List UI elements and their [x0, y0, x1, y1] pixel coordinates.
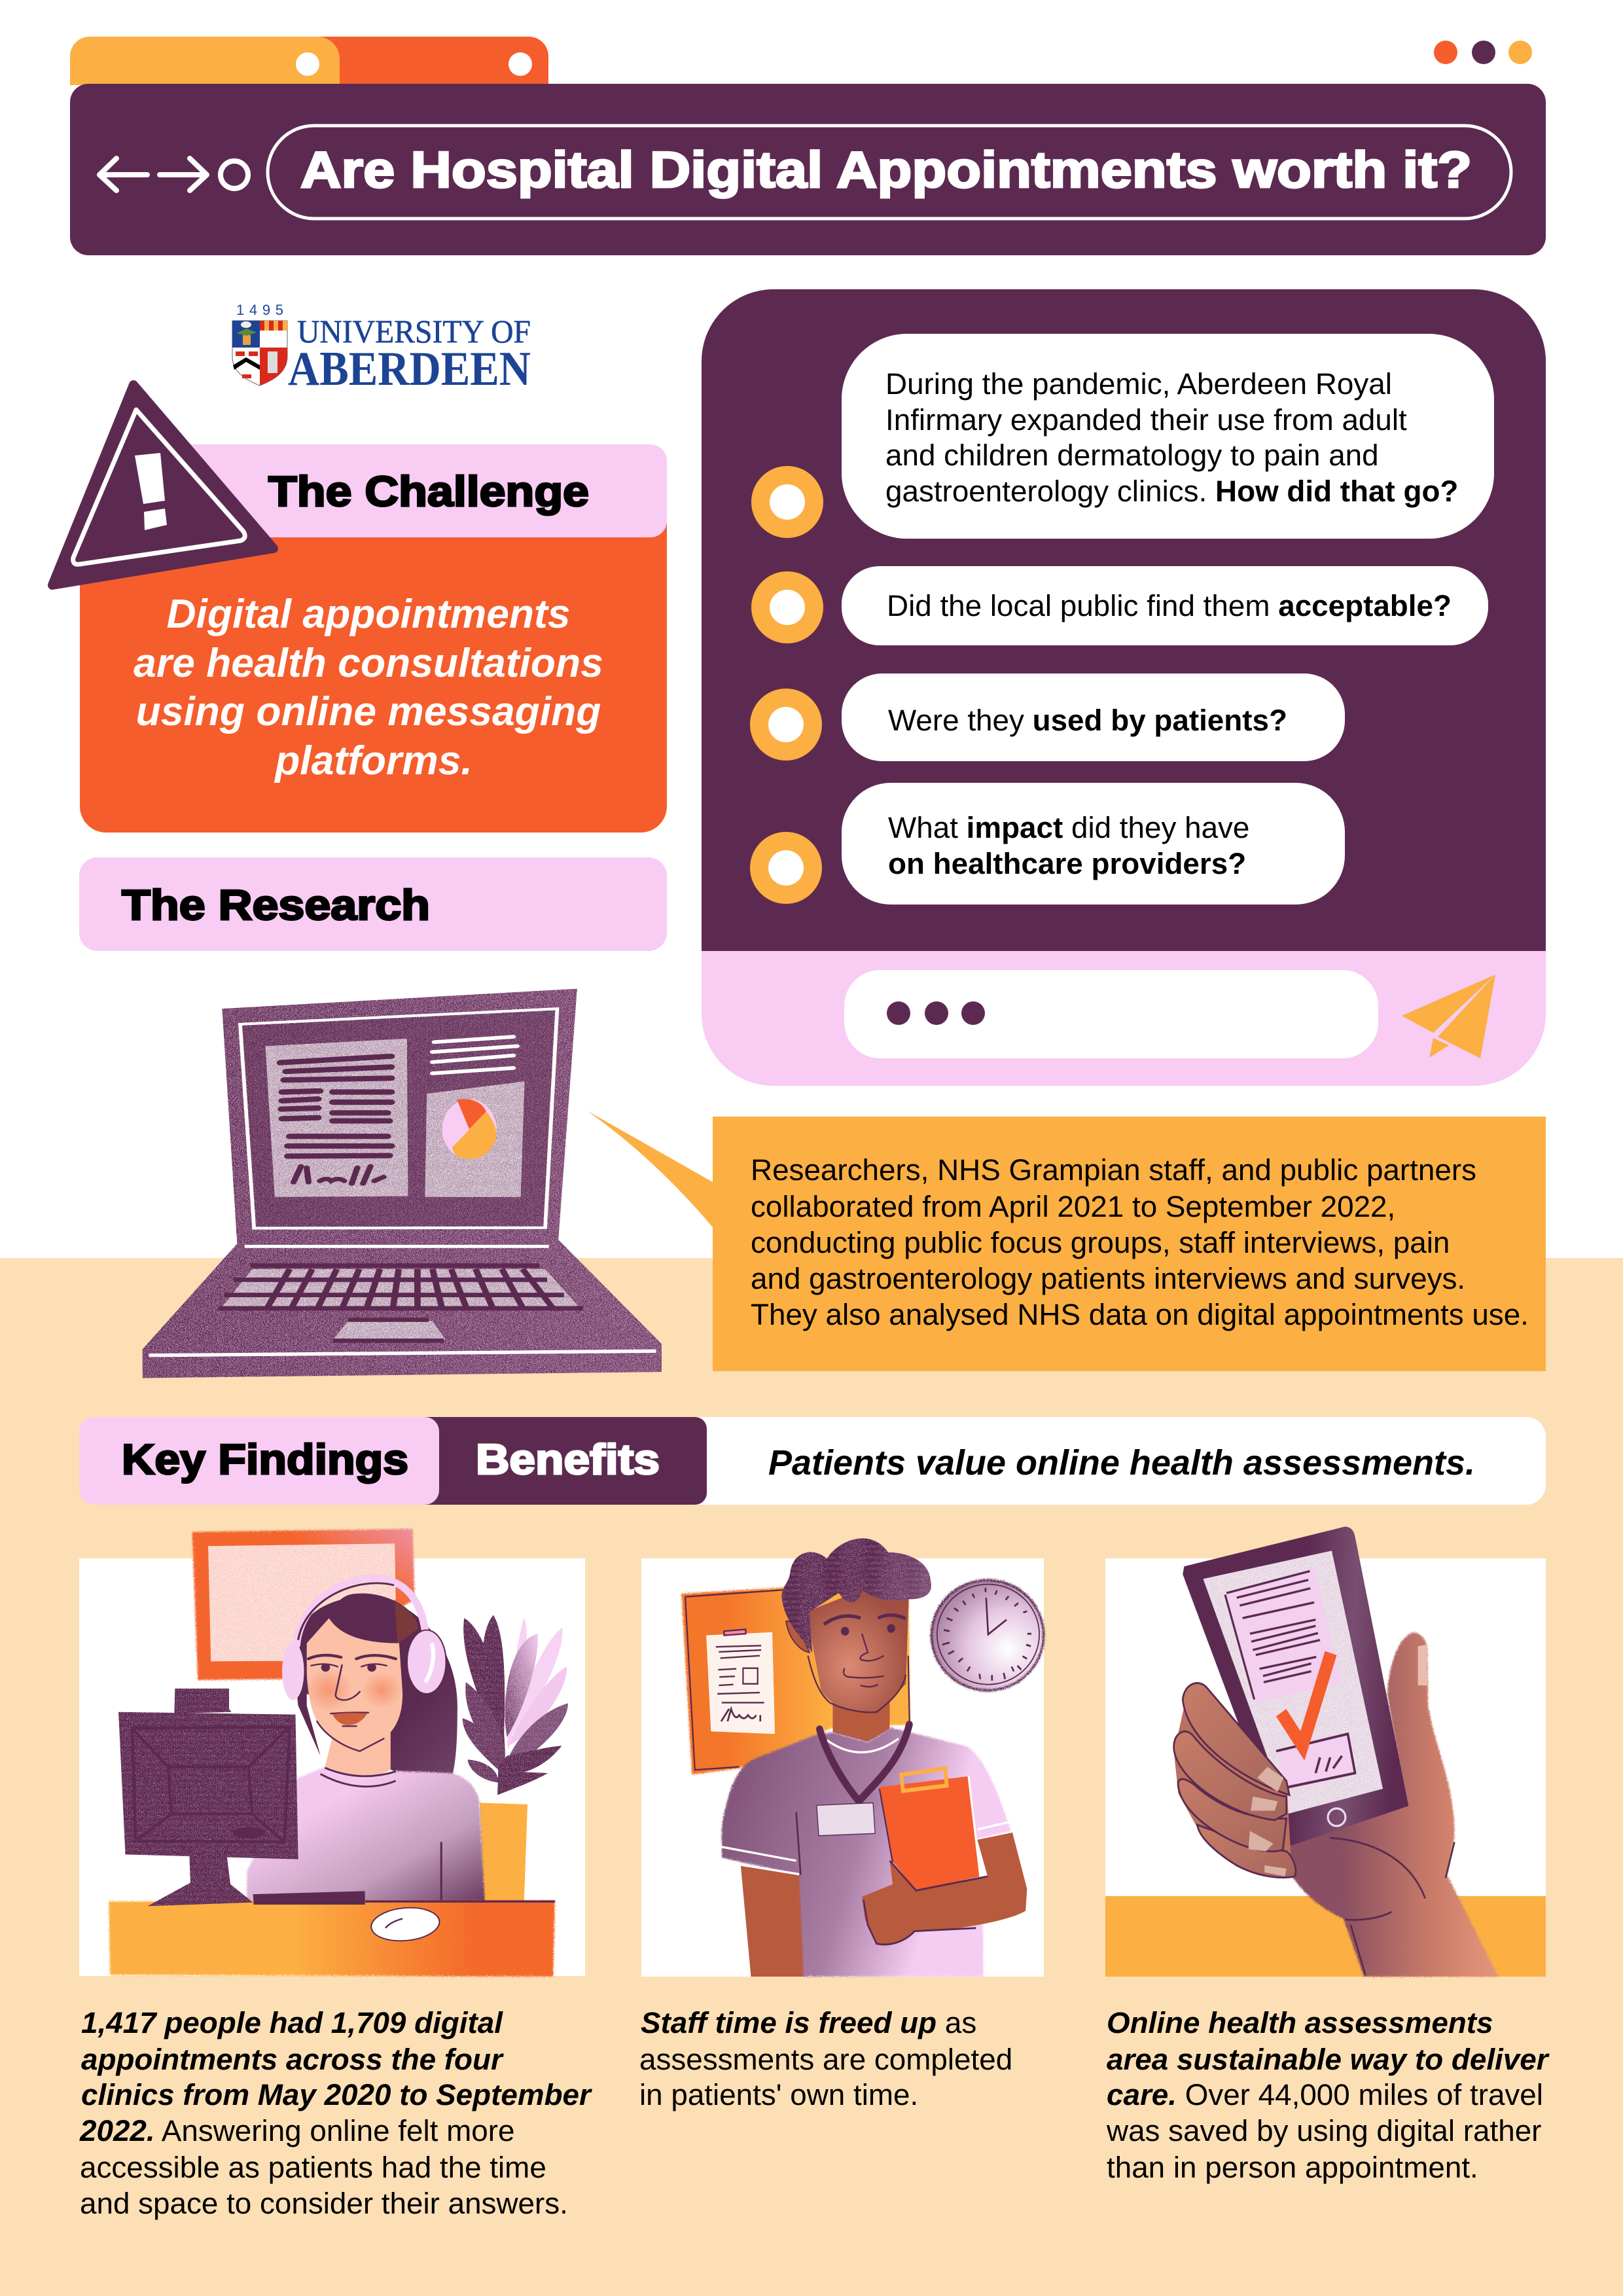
desk: [109, 1901, 555, 1977]
callout text: collaborated from April 2021 to September 2022,: [751, 1190, 1395, 1223]
screen dark inner: [243, 1011, 554, 1226]
challenge heading: The Challenge: [268, 467, 589, 515]
illustration: hand holding phone with checkmark: [1174, 1527, 1498, 1977]
challenge pink heading bar: [164, 444, 667, 537]
plant: [463, 1615, 568, 1795]
panel 2 backdrop: [641, 1558, 1044, 1977]
chat bubble 3: [842, 673, 1345, 761]
benefits label: Benefits: [476, 1435, 660, 1483]
callout text: Researchers, NHS Grampian staff, and public partners: [751, 1153, 1476, 1187]
illustration: clinician with clipboard: [681, 1538, 1044, 1977]
finding 1 text: and space to consider their answers.: [80, 2187, 568, 2220]
University of Aberdeen logo: [232, 302, 531, 396]
finding 3 text: than in person appointment.: [1107, 2151, 1478, 2184]
laptop keyboard: [219, 1266, 582, 1309]
challenge description: platforms.: [274, 738, 473, 783]
challenge description: [134, 592, 603, 783]
lanyard: [819, 1725, 909, 1801]
chat window purple body: [702, 289, 1546, 951]
monitor back detail lines: [132, 1727, 290, 1842]
hair back: [305, 1597, 457, 1778]
finding 3 text: care. Over 44,000 miles of travel: [1107, 2078, 1543, 2111]
keyboard: [253, 1891, 365, 1905]
logo shield: [232, 321, 287, 386]
chat input field with typing dots: [844, 970, 1378, 1058]
screen white lines right: [433, 1037, 517, 1073]
hand palm and thumb: [1275, 1632, 1498, 1977]
navigation icons: back, forward, reload: [99, 158, 248, 190]
check mark: [1281, 1653, 1331, 1746]
finding 2 text: in patients' own time.: [639, 2078, 918, 2111]
clipboard: [880, 1768, 980, 1890]
heading bar: the research: The Research: [122, 881, 430, 929]
laptop body: [143, 989, 662, 1378]
finding 3 text: was saved by using digital rather: [1106, 2114, 1541, 2147]
question marker 2: [751, 571, 823, 643]
desk edge line: [365, 1899, 555, 1904]
sweater: [247, 1767, 485, 1901]
University of Aberdeen logo: UNIVERSITY OF: [297, 313, 531, 350]
benefits purple tab: [393, 1417, 707, 1505]
home button: [1328, 1808, 1346, 1826]
illustration: laptop: [143, 989, 662, 1378]
challenge description: using online messaging: [136, 689, 601, 734]
findings header bar: [79, 1417, 1546, 1505]
panel: the challenge: [52, 385, 667, 833]
neck: [325, 1725, 391, 1781]
callout text: conducting public focus groups, staff interviews, pain: [751, 1226, 1450, 1259]
screen chart document with pie: [425, 1081, 524, 1197]
phone: [1183, 1527, 1408, 1846]
key findings label: Key Findings: [122, 1435, 408, 1483]
chat bubble 4: What impact did they have: [888, 811, 1249, 844]
shirt seam: [796, 1812, 800, 1875]
finding 1 text: clinics from May 2020 to September: [81, 2078, 592, 2111]
lower peach background band: [0, 1258, 1623, 2296]
icon: warning triangle: [52, 385, 274, 585]
left hair strand: [297, 1618, 329, 1756]
finding 1 text: appointments across the four: [81, 2043, 504, 2076]
neck: [832, 1693, 890, 1742]
heading bar: the research: [79, 857, 667, 951]
illustration: woman with headset at a computer: [109, 1529, 568, 1977]
icon: paper plane send button: [1402, 975, 1495, 1058]
finding 2 text: [639, 2006, 1012, 2111]
palm lines: [1330, 1838, 1454, 1975]
panel 1 backdrop: [79, 1558, 585, 1976]
chat bubble 1: gastroenterology clinics. How did that go?: [885, 475, 1458, 508]
signature box: [1276, 1736, 1355, 1787]
chat bubble 4: [842, 783, 1345, 905]
callout box: [713, 1117, 1546, 1371]
white bar: [79, 1417, 1546, 1505]
forearm and hand: [862, 1833, 1027, 1945]
mouse: [369, 1905, 441, 1944]
chat bubble 3: Were they used by patients?: [888, 704, 1287, 737]
callout text: and gastroenterology patients interviews and surveys.: [751, 1262, 1465, 1295]
callout text: They also analysed NHS data on digital appointments use.: [751, 1298, 1529, 1331]
chat bubble 1: [842, 334, 1494, 539]
thumb nail: [1418, 1645, 1427, 1685]
callout text: [751, 1153, 1529, 1331]
phone screen: [1203, 1551, 1383, 1814]
phone document: [1225, 1568, 1342, 1702]
chat bubble 2: Did the local public find them acceptable?: [887, 589, 1452, 622]
title address pill: [268, 126, 1511, 219]
left arm: [741, 1865, 805, 1977]
callout pointer: [587, 1111, 713, 1227]
facial features: [308, 1655, 396, 1751]
chat window pink input strip: [702, 951, 1546, 1086]
finding 2 text: assessments are completed: [639, 2043, 1012, 2076]
window control dots: [1434, 41, 1532, 64]
face: [306, 1618, 402, 1751]
cheeks: [305, 1668, 353, 1712]
chat bubble 1: During the pandemic, Aberdeen Royal: [885, 367, 1392, 401]
chair back: [480, 1803, 527, 1901]
headphones: [296, 1578, 425, 1646]
uniform shirt: [722, 1728, 1011, 1977]
title text: Are Hospital Digital Appointments worth it?: [300, 141, 1472, 198]
laptop trackpad: [333, 1320, 446, 1340]
wall picture frame: [192, 1529, 414, 1680]
finding 1 text: 1,417 people had 1,709 digital: [81, 2006, 503, 2039]
browser tab: orange: [288, 37, 548, 85]
arm outline: [863, 1861, 988, 1945]
finding 1 text: 2022. Answering online felt more: [79, 2114, 514, 2147]
pinned paper: [706, 1629, 775, 1734]
notice board: [681, 1587, 910, 1774]
question marker 3: [750, 689, 822, 761]
id badge: [817, 1803, 875, 1836]
logo wordmark: 1495: [236, 302, 283, 318]
hair: [781, 1538, 931, 1653]
challenge description: are health consultations: [134, 641, 603, 686]
research description callout: [587, 1111, 1546, 1371]
chat bubble 2: [842, 566, 1488, 645]
finding 3 text: Online health assessments: [1107, 2006, 1493, 2039]
University of Aberdeen logo: ABERDEEN: [288, 342, 531, 396]
question marker 4: [750, 832, 822, 904]
yellow band: [1105, 1896, 1546, 1977]
header: browser window with title: [70, 37, 1546, 255]
browser tab: yellow: [70, 37, 340, 92]
chat bubble 1: Infirmary expanded their use from adult: [885, 403, 1407, 437]
panel 3 backdrop: [1105, 1558, 1546, 1977]
title bar: [70, 84, 1546, 255]
finding 1 text: [79, 2006, 592, 2220]
head: [786, 1590, 909, 1713]
wall clock: [931, 1580, 1044, 1691]
woman: [247, 1578, 485, 1901]
fringe: [329, 1594, 418, 1643]
chat bubble 1: and children dermatology to pain and: [885, 439, 1379, 472]
laptop base edge and screen frame lines: [149, 1009, 656, 1355]
key findings pink tab: [79, 1417, 439, 1505]
document lines: [1225, 1571, 1320, 1700]
finding 3 text: [1106, 2006, 1550, 2184]
computer monitor: [118, 1689, 298, 1906]
sleeve trims: [721, 1738, 1012, 1874]
question marker 1: [751, 466, 823, 538]
chat bubble 4: on healthcare providers?: [888, 847, 1246, 880]
tagline: Patients value online health assessments.: [768, 1443, 1475, 1482]
challenge description: Digital appointments: [166, 592, 571, 637]
challenge orange card: [80, 511, 667, 833]
screen document left: [265, 1039, 408, 1197]
fingers: [1174, 1683, 1296, 1878]
panel: chat window with research questions: [702, 289, 1546, 1086]
finding 1 text: accessible as patients had the time: [80, 2151, 546, 2184]
finding 3 text: area sustainable way to deliver: [1107, 2043, 1550, 2076]
finding 2 text: Staff time is freed up as: [641, 2006, 976, 2039]
